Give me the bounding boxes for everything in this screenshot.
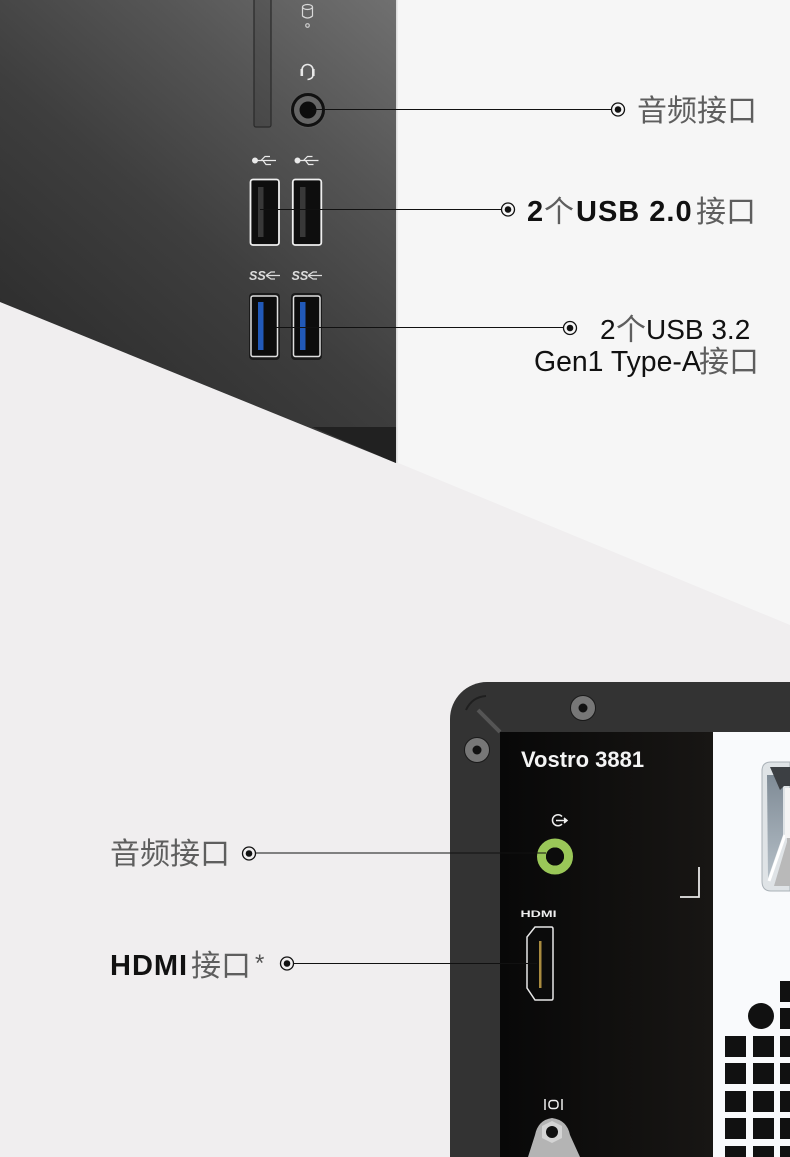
callout: audio port bottom: [110, 829, 546, 873]
card reader slot: [254, 0, 271, 127]
model name: Vostro 3881: [521, 747, 644, 772]
usb 2.0 port left: [250, 180, 279, 245]
usb 3.2 symbols: SS: [292, 269, 309, 283]
callout: usb 2.0: 个: [544, 187, 574, 231]
serial icon: [545, 1099, 562, 1110]
callout: hdmi: 接口: [191, 941, 251, 985]
green audio jack: [542, 843, 568, 870]
callout: hdmi: [110, 941, 537, 985]
icon: audio out: [552, 815, 567, 826]
callout: usb 2.0: USB 2.0: [576, 196, 693, 228]
panel: rear of desktop: [450, 682, 790, 1157]
usb 3.2 port left: [249, 293, 280, 360]
icon: usb 2.0 symbols: [253, 156, 318, 164]
callout: usb 3.2: 2: [600, 314, 616, 345]
hdmi port: [527, 927, 553, 1000]
usb 3.2 port right: [291, 293, 322, 360]
vent grille: [725, 981, 790, 1157]
callout: audio port top: [312, 86, 757, 130]
usb 2.0 port right: [293, 180, 321, 245]
callout: usb 3.2: 接口: [699, 337, 759, 381]
hdmi label: HDMI: [520, 909, 556, 919]
serial connector: [528, 1118, 580, 1157]
panel: desktop tower front: [0, 0, 398, 463]
callout: usb 3.2: [276, 305, 759, 381]
callout: usb 2.0: [260, 187, 756, 231]
corner mark: [680, 867, 699, 897]
callout: usb 2.0: 2: [527, 196, 544, 228]
screw left: [464, 738, 490, 762]
metal handle: [762, 762, 790, 891]
icon: headset: [300, 64, 315, 80]
icon: hard drive activity: [302, 4, 312, 27]
callout: hdmi: HDMI: [110, 950, 188, 982]
usb 3.2 symbols: SS: [249, 269, 266, 283]
callout: audio port bottom: 音频接口: [110, 829, 230, 873]
callout: usb 3.2: 个: [616, 305, 646, 349]
callout: hdmi: *: [255, 950, 264, 977]
usb 3.2 symbols: [249, 269, 322, 283]
callout: audio port top: 音频接口: [637, 86, 757, 130]
callout: usb 3.2: USB 3.2: [646, 314, 750, 345]
audio jack: [290, 92, 326, 128]
callout: usb 3.2: Gen1 Type-A: [534, 346, 701, 378]
upper background panel: [0, 0, 790, 625]
screw top: [570, 696, 596, 720]
callout: usb 2.0: 接口: [696, 187, 756, 231]
